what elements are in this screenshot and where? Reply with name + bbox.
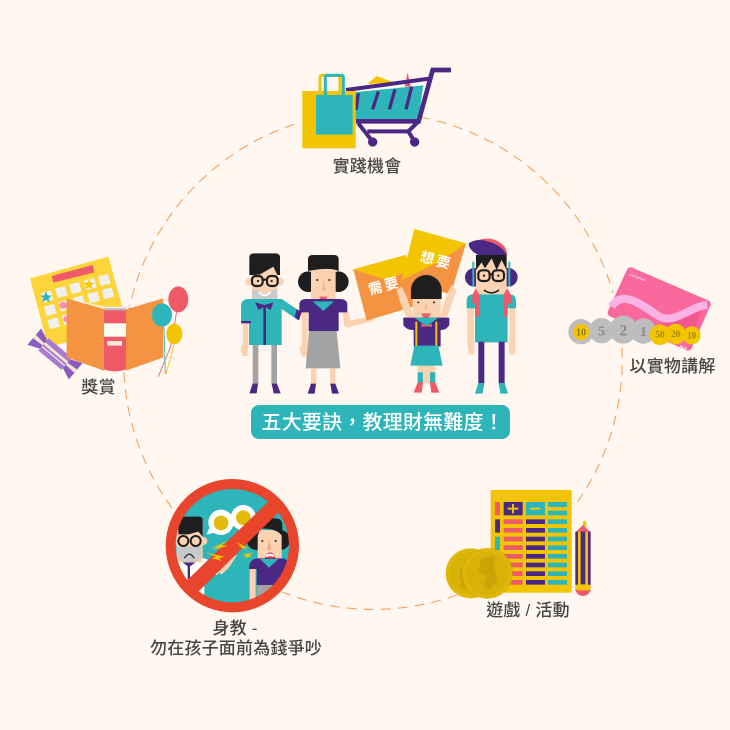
label: practice opportunity: 實踐機會 — [333, 157, 401, 176]
grandfather — [241, 253, 302, 393]
envelope: needs — [353, 255, 419, 321]
headline banner — [251, 405, 510, 439]
grandmother — [298, 255, 374, 394]
icon: no-arguing prohibition sign — [171, 484, 294, 608]
girl — [397, 275, 457, 393]
icon: octopus card and coins: 50 — [655, 331, 665, 341]
icon: octopus card and coins: 10 — [687, 331, 697, 341]
speech bubbles with coins — [207, 505, 256, 535]
icon: octopus card and coins: 10 — [576, 328, 586, 339]
label: lead by example — [150, 619, 322, 658]
label: reward: 獎賞 — [81, 378, 116, 397]
central family illustration — [241, 229, 518, 394]
icon: octopus card and coins: 1 — [640, 325, 647, 340]
label: lead by example: 身教 - — [212, 619, 258, 638]
envelope: needs: 需要 — [367, 273, 403, 298]
icon: octopus card and coins: 2 — [619, 322, 627, 339]
icon: octopus card and coins: 5 — [598, 324, 605, 339]
label: explain with real objects: 以實物講解 — [630, 356, 716, 376]
icon: octopus card and coins: OCTOPUS — [629, 273, 646, 282]
icon: octopus card and coins: HLD — [679, 345, 688, 351]
envelope: wants: 想要 — [418, 248, 455, 272]
woman arguing — [247, 518, 289, 600]
icon: octopus card and coins — [568, 271, 707, 351]
man arguing — [176, 516, 238, 595]
lightning bolts — [206, 541, 253, 561]
envelope: wants — [402, 229, 466, 294]
icon: worksheet, coins and pencil — [446, 490, 591, 598]
label: lead by example: 勿在孩子面前為錢爭吵 — [150, 639, 322, 658]
icon: shopping bag and cart — [302, 70, 451, 148]
dashed cycle ring — [124, 117, 622, 609]
headline banner: 五大要訣，教理財無難度！ — [262, 411, 504, 434]
label: games and activities: 遊戲 / 活動 — [486, 601, 570, 620]
icon: octopus card and coins: 20 — [671, 330, 681, 340]
icon: reward calendar, candy, book and balloons — [27, 257, 188, 380]
boy with cap and headphones — [465, 239, 518, 394]
